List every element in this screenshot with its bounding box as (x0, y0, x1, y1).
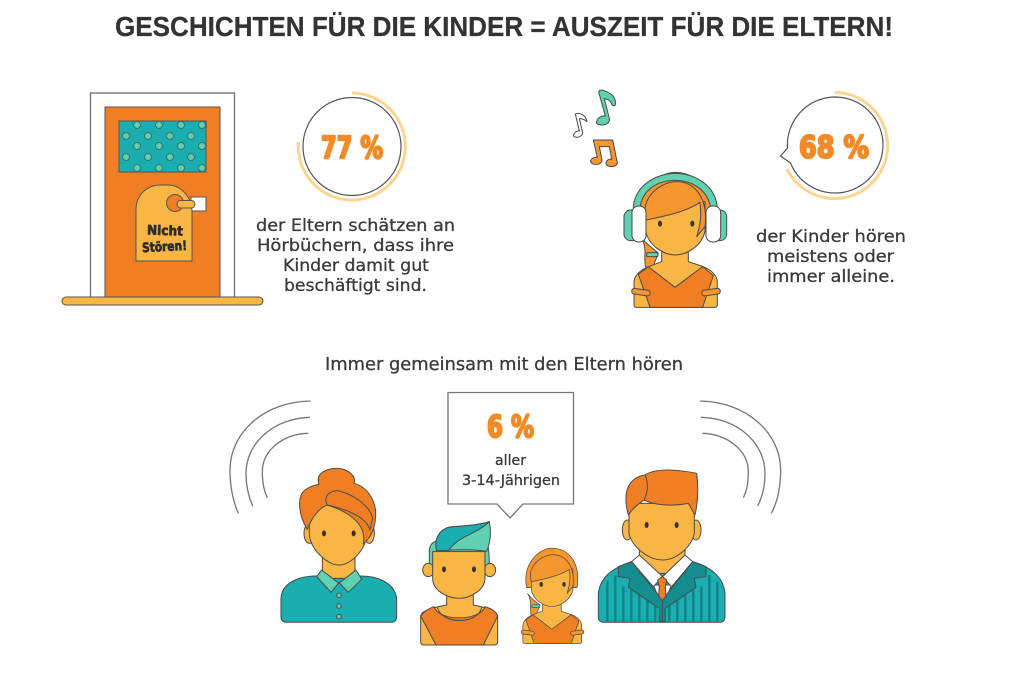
speech box: 6 %: 6 % (487, 410, 534, 445)
speech box: 6 % (448, 392, 574, 518)
icon: small girl (521, 548, 584, 643)
stat bubble: 68 %: 68 % (799, 130, 869, 166)
text: parents statement: der Eltern schätzen an (256, 216, 455, 236)
stat circle: 77 %: 77 % (321, 131, 383, 166)
icon: boy (421, 522, 498, 645)
text: children statement: immer alleine. (767, 267, 895, 287)
text: parents statement (256, 216, 455, 296)
hanger text: Stören! (142, 239, 187, 256)
hanger text: Nicht (147, 223, 183, 240)
icon: father (598, 470, 725, 622)
text: parents statement: beschäftigt sind. (284, 276, 427, 296)
icon: girl with headphones (624, 172, 727, 307)
text: children statement (756, 227, 906, 287)
icon: music notes (574, 90, 617, 167)
speech box: 6 %: aller (495, 453, 526, 469)
subheading: Immer gemeinsam mit den Eltern hören (325, 355, 683, 375)
sound waves right (700, 401, 781, 513)
sound waves left (230, 401, 311, 513)
stat circle: 77 % (298, 93, 405, 200)
title: GESCHICHTEN FÜR DIE KINDER = AUSZEIT FÜR DIE ELTERN! (115, 11, 893, 42)
text: parents statement: Kinder damit gut (283, 256, 429, 276)
text: children statement: der Kinder hören (756, 227, 906, 247)
hanger text (142, 223, 187, 256)
text: children statement: meistens oder (767, 247, 894, 267)
icon: door with do-not-disturb hanger (62, 93, 263, 305)
icon: mother (281, 468, 397, 622)
speech box: 6 %: 3-14-Jährigen (462, 473, 560, 489)
text: parents statement: Hörbüchern, dass ihre (257, 236, 454, 256)
stat bubble: 68 % (780, 92, 888, 198)
